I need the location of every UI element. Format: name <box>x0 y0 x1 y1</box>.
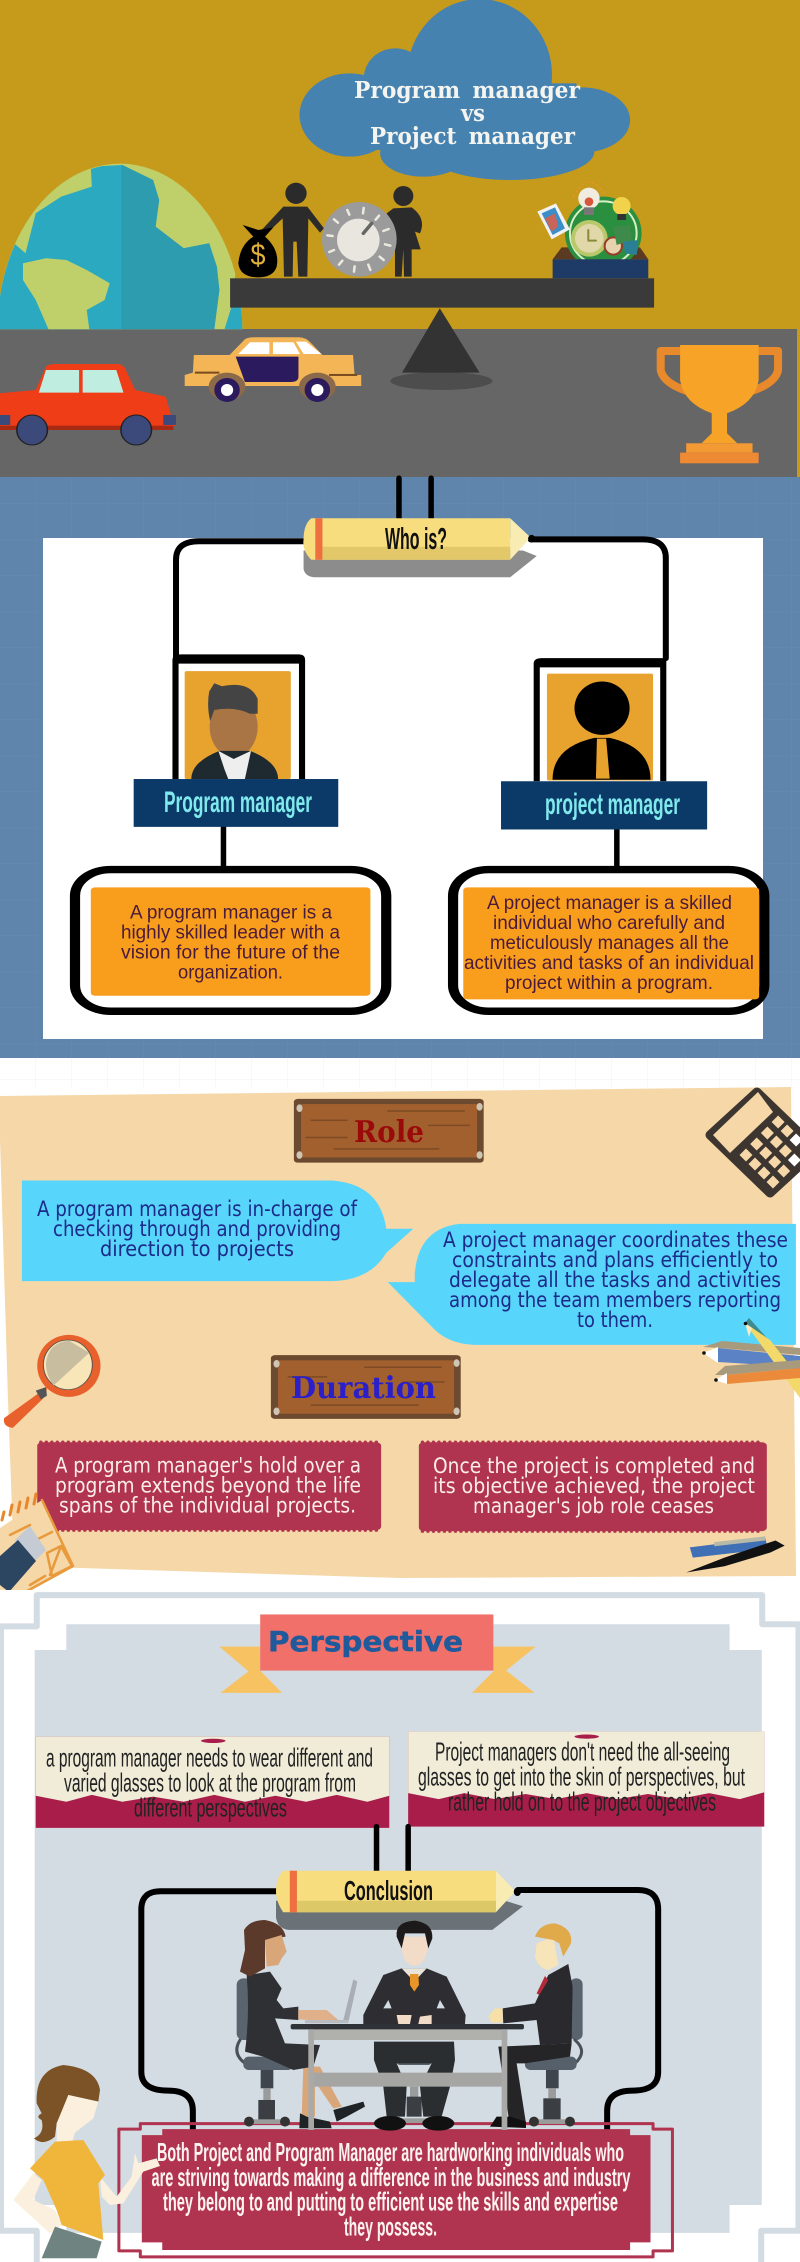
text: conclusion: they possess. <box>344 2212 437 2242</box>
conclusion box <box>119 2124 672 2257</box>
inner panel <box>35 1624 762 2233</box>
cloud <box>299 0 630 180</box>
heading: perspective: Perspective <box>268 1625 463 1658</box>
title: Project manager <box>370 123 576 150</box>
icon: magnifier <box>4 1335 101 1428</box>
connector lines <box>141 1827 658 2129</box>
text: project manager duration: manager's job role ceases <box>473 1494 714 1518</box>
text: project manager definition: individual who carefully and <box>493 912 725 934</box>
text: project manager duration: Once the project is completed and <box>433 1454 755 1478</box>
dollar sign: $ <box>250 237 266 272</box>
heading: role: Role <box>354 1115 424 1150</box>
text: project manager role <box>443 1228 788 1332</box>
pencil: who is <box>303 518 537 577</box>
icon: notebook and usb <box>0 1494 73 1596</box>
text: program manager perspective: different perspectives <box>134 1792 287 1822</box>
card: project manager duration <box>419 1442 767 1531</box>
text: program manager definition: organization. <box>178 962 283 984</box>
objects on seesaw <box>238 182 648 278</box>
text: project manager definition: project within a program. <box>505 972 713 994</box>
text: program manager duration: spans of the individual projects. <box>59 1494 356 1518</box>
icon: yellow taxi <box>185 337 361 402</box>
icon: red car <box>0 364 176 445</box>
text: program manager definition: vision for the future of the <box>121 942 340 964</box>
icon: pens <box>686 1536 785 1572</box>
heading: duration: Duration <box>291 1371 436 1406</box>
heading: conclusion: Conclusion <box>344 1875 433 1906</box>
text: program manager definition: A program manager is a <box>130 902 332 924</box>
icon: globe <box>0 164 244 329</box>
text: program manager definition: highly skilled leader with a <box>121 922 340 944</box>
text: program manager role: checking through and providing <box>53 1217 341 1241</box>
portrait: program manager <box>172 654 305 783</box>
ribbon: perspective <box>219 1614 536 1693</box>
panel: who is <box>0 477 800 1058</box>
text: program manager duration <box>55 1454 361 1518</box>
panel: perspective and conclusion <box>0 1590 800 2262</box>
text: program manager definition <box>121 902 340 984</box>
label bar: project manager <box>501 781 707 829</box>
label: program manager: Program manager <box>164 786 312 819</box>
text: program manager role <box>37 1197 358 1261</box>
text: project manager duration: its objective achieved, the project <box>433 1474 755 1498</box>
icon: trophy <box>661 345 778 463</box>
text: program manager role: direction to projects <box>100 1237 294 1261</box>
speech bubble: program manager <box>22 1181 413 1281</box>
figure: presenter <box>13 2065 160 2258</box>
title: Program manager <box>354 77 581 104</box>
title <box>354 77 581 150</box>
seesaw beam <box>230 278 654 308</box>
text: program manager perspective: varied glasses to look at the program from <box>64 1768 356 1798</box>
definition frame: project manager <box>453 870 764 1011</box>
icon: coloured pencils <box>702 1318 800 1398</box>
figure: man <box>262 183 324 277</box>
figure: woman <box>387 186 422 277</box>
text: project manager definition: activities and tasks of an individual <box>464 952 754 974</box>
heading: who is: Who is? <box>385 521 447 556</box>
text: program manager perspective: a program manager needs to wear different and <box>46 1742 373 1772</box>
text: project manager definition: A project manager is a skilled <box>487 892 732 914</box>
text: project manager definition <box>464 892 754 994</box>
plank: role <box>294 1099 484 1163</box>
illustration: meeting <box>237 1920 583 2131</box>
connector lines <box>176 478 666 868</box>
icon: innovation pot <box>537 182 648 278</box>
label: project manager: project manager <box>545 788 680 821</box>
card: program manager perspective <box>36 1737 389 1828</box>
text: program manager duration: A program manager's hold over a <box>55 1454 361 1478</box>
table <box>291 2024 524 2130</box>
text: project manager duration <box>433 1454 755 1518</box>
card: program manager duration <box>37 1442 381 1530</box>
text: program manager role: A program manager is in-charge of <box>37 1197 358 1221</box>
icon: calculator <box>710 1092 800 1193</box>
header panel <box>0 0 800 477</box>
icon: money bag <box>238 225 277 277</box>
text: project manager role: to them. <box>577 1308 653 1332</box>
panel: role and duration <box>0 1058 800 1596</box>
card: project manager perspective <box>408 1731 764 1827</box>
figure: man in centre <box>363 1921 466 2131</box>
plank: duration <box>271 1355 461 1419</box>
text: program manager duration: program extends beyond the life <box>55 1474 361 1498</box>
icon: dial <box>322 202 397 277</box>
title: vs <box>460 100 485 127</box>
text: conclusion <box>152 2137 631 2242</box>
text: program manager perspective <box>46 1742 373 1822</box>
seesaw pivot <box>390 308 492 390</box>
figure: man on right <box>488 1923 583 2128</box>
text: project manager definition: meticulously manages all the <box>490 932 729 954</box>
text: project manager perspective <box>418 1736 745 1816</box>
definition frame: program manager <box>75 870 386 1011</box>
pencil: conclusion <box>276 1871 523 1930</box>
label bar: program manager <box>134 779 338 827</box>
frame outline <box>1 1595 798 2262</box>
figure: woman at laptop <box>237 1920 365 2128</box>
speech bubble: project manager <box>388 1224 796 1345</box>
portrait: project manager <box>534 658 666 785</box>
